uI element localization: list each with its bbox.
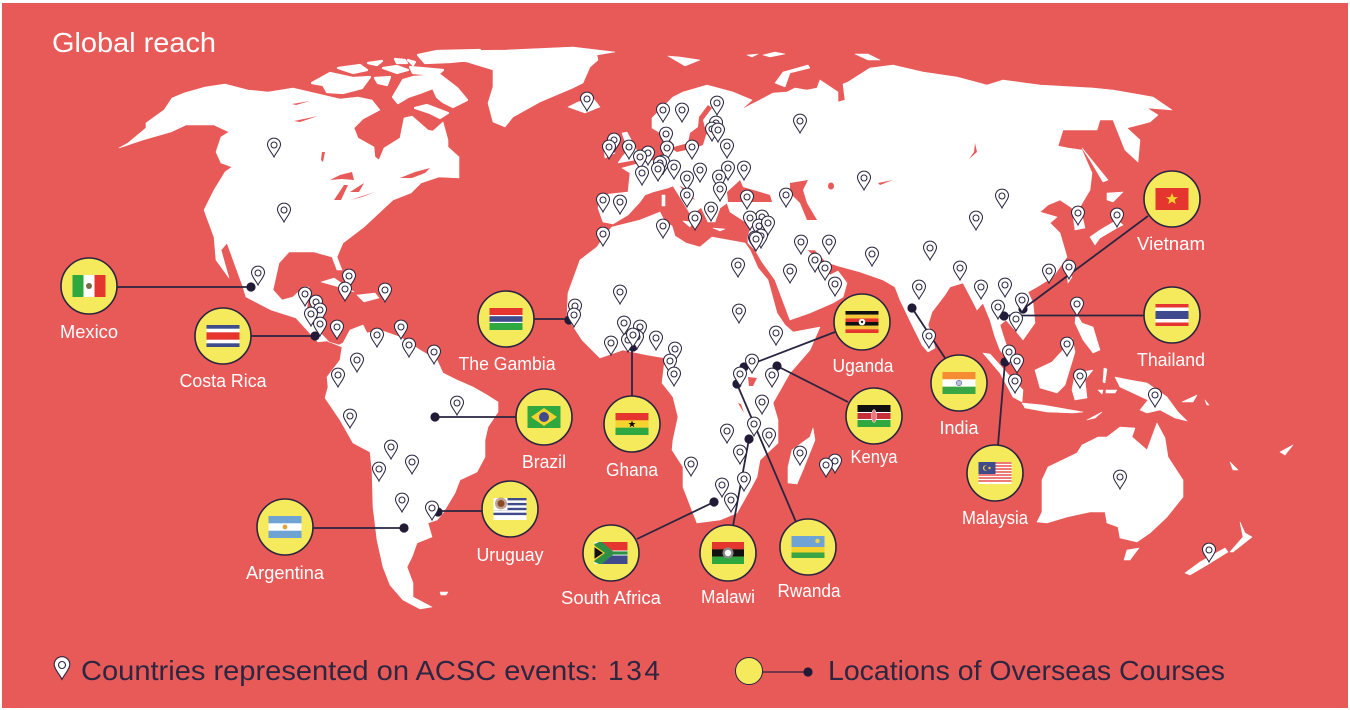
connector: Ghana (628, 342, 638, 396)
flag: The Gambia (490, 308, 522, 330)
badge: Kenya (846, 388, 902, 467)
label: The Gambia: The Gambia (458, 354, 556, 374)
badge: Malawi (700, 525, 756, 607)
flag: Thailand (1156, 304, 1188, 326)
connector: South Africa (637, 497, 719, 539)
label: Uruguay: Uruguay (476, 545, 544, 565)
Baltic Sea (670, 105, 712, 152)
landmass: Britain and Ireland (603, 132, 640, 163)
flag: Uganda (846, 311, 878, 333)
flag: India (942, 372, 976, 394)
world map (119, 47, 1293, 609)
connector: Rwanda (732, 379, 796, 522)
connector: Malaysia (998, 357, 1010, 445)
label: Kenya: Kenya (850, 447, 898, 467)
legend: countries represented (54, 655, 660, 686)
connector lines (117, 216, 1148, 539)
connector: Argentina (313, 523, 409, 533)
flag: Ghana (616, 413, 648, 435)
connector: Vietnam (1018, 216, 1148, 314)
landmass: Novaya Zemlya (775, 65, 810, 87)
legend: overseas courses (736, 655, 1225, 686)
connector: Kenya (772, 361, 848, 402)
connector: Costa Rica (251, 331, 320, 341)
landmass: Mediterranean islands (662, 195, 725, 231)
inland seas and lakes (292, 101, 977, 413)
flag: Uruguay (494, 498, 526, 520)
Caspian Sea (790, 180, 817, 220)
connector: Malawi (733, 434, 754, 526)
badge: Malaysia (962, 445, 1029, 528)
label: India: India (940, 418, 979, 438)
connector: The Gambia (534, 315, 574, 325)
landmass: Australia (1037, 423, 1183, 542)
badge: Uruguay (476, 481, 544, 565)
legend text: overseas courses: Locations of Overseas Courses (828, 655, 1225, 686)
landmass: Greenland (437, 47, 615, 127)
label: Brazil: Brazil (522, 452, 566, 472)
badge: Thailand (1137, 287, 1205, 370)
connector: Uganda (739, 332, 835, 372)
landmass: New Zealand (1185, 522, 1252, 575)
landmass: northern Russian islands (668, 52, 880, 66)
landmass: Madagascar (788, 428, 815, 484)
flag: Vietnam (1156, 188, 1188, 210)
badge: Costa Rica (180, 308, 267, 391)
flag: Malaysia (978, 462, 1012, 484)
label: Uganda: Uganda (832, 356, 894, 376)
Asian and African lakes (738, 143, 977, 413)
badge: Brazil (516, 389, 572, 472)
location pins (252, 92, 1216, 562)
landmass: Africa (567, 212, 820, 523)
connector: Thailand (999, 311, 1144, 321)
flag: Brazil (528, 406, 560, 428)
landmass: Iceland (568, 98, 600, 113)
landmass: Eurasia (598, 65, 1172, 365)
flag: Costa Rica (206, 325, 240, 347)
legend text: countries: Countries represented on ACSC events: (81, 655, 598, 686)
badge: Argentina (246, 499, 325, 583)
Canadian lakes (292, 101, 318, 122)
badge: Ghana (604, 396, 660, 480)
label: Malawi: Malawi (701, 587, 755, 607)
flag: Mexico (72, 275, 106, 297)
label: Thailand: Thailand (1137, 350, 1205, 370)
landmass: Pacific islands (1230, 445, 1293, 470)
label: Costa Rica: Costa Rica (180, 371, 267, 391)
landmass: Southeast Asian islands (983, 313, 1209, 421)
label: Mexico: Mexico (60, 322, 118, 342)
badge: India (931, 355, 987, 438)
connector: Brazil (430, 412, 516, 422)
icon: legend connector (736, 658, 813, 684)
Black Sea (727, 180, 772, 202)
connector: Uruguay (433, 507, 482, 517)
title: Global reach (52, 27, 216, 58)
flag: South Africa (594, 542, 628, 564)
label: Rwanda: Rwanda (778, 581, 841, 601)
landmass: Tasmania (1124, 548, 1139, 560)
badge: Uganda (832, 294, 894, 376)
label: South Africa: South Africa (561, 588, 662, 608)
label: Malaysia: Malaysia (962, 508, 1029, 528)
landmass: Caribbean islands (321, 278, 448, 595)
landmass: Arctic islands (312, 50, 480, 118)
label: Argentina: Argentina (246, 563, 325, 583)
badge: The Gambia (458, 291, 556, 374)
badge: Vietnam (1137, 171, 1205, 254)
flag: Kenya (858, 405, 890, 427)
landmass: Japan, Sakhalin and Taiwan (1067, 148, 1123, 283)
connector: India (907, 303, 945, 358)
legend number: 134: 134 (608, 655, 660, 686)
badge: South Africa (561, 525, 662, 608)
flag: Rwanda (792, 536, 824, 558)
icon: legend pin (54, 657, 70, 679)
Great Lakes (321, 152, 430, 200)
flag: Argentina (268, 516, 302, 538)
connector: Mexico (117, 282, 256, 292)
label: Ghana: Ghana (606, 460, 659, 480)
flag: Malawi (712, 542, 744, 564)
landmass: the Americas (119, 84, 498, 609)
badge: Mexico (60, 258, 118, 342)
label: Vietnam: Vietnam (1137, 234, 1205, 254)
badge: Rwanda (778, 519, 841, 601)
